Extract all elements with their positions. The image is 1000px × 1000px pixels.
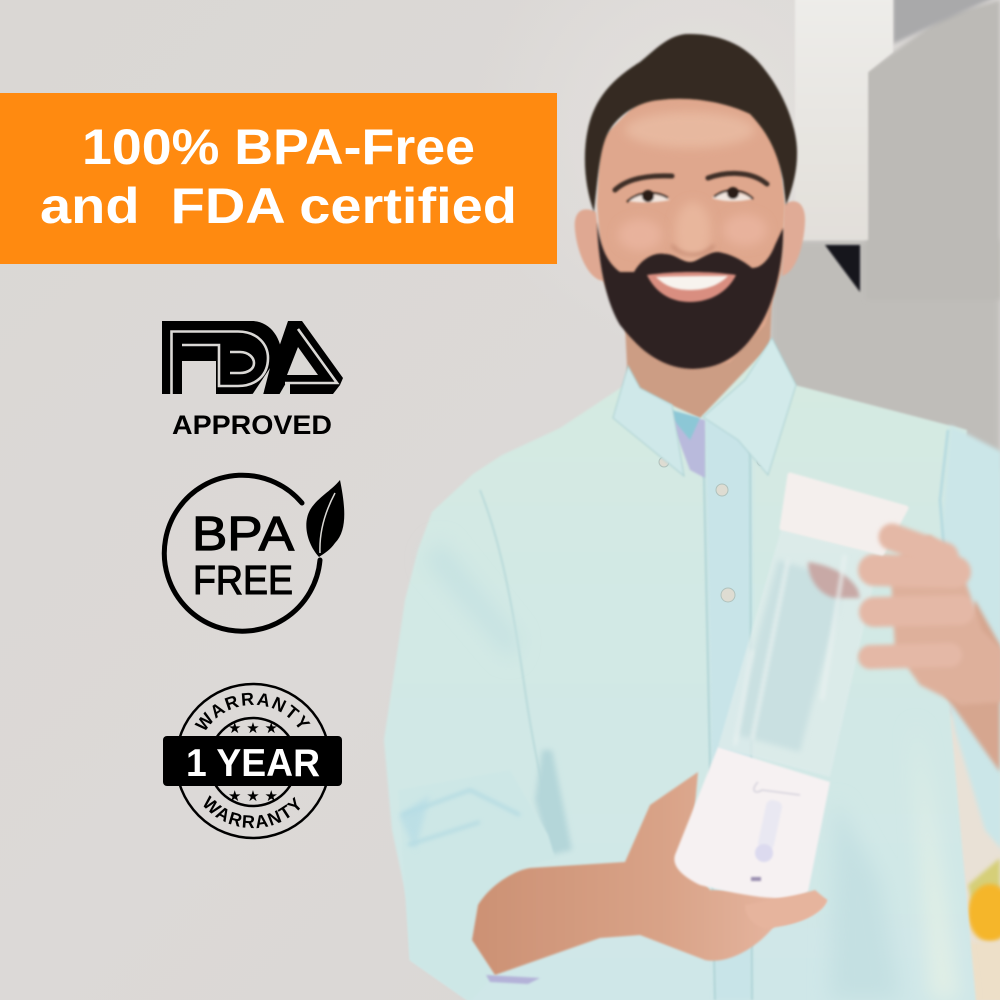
shirt left cuff folds [398,770,555,1000]
under collar stripe [668,412,705,478]
right collar [703,338,796,475]
lower fingers [745,890,827,928]
beard [597,222,783,369]
banner heading: 100% BPA-Free [82,119,475,175]
approved label: APPROVED [172,410,332,440]
right ear [782,201,805,276]
face [597,92,785,370]
FDA cut lines [172,329,337,394]
FDA A counter [287,347,318,375]
year text: 1 YEAR [186,742,320,785]
orange banner [0,93,557,264]
icon: BPA free badge [164,475,344,631]
banner heading: and FDA certified [40,178,517,234]
mouth [647,272,736,302]
nose shadow [672,245,714,255]
palm [890,535,1000,705]
purple cuff lining [486,975,540,984]
right sleeve [940,425,1000,850]
bottle cap [782,475,906,553]
icon: one year warranty stamp [163,682,342,840]
bottle inner tube [738,560,845,752]
BPA text: BPA [192,508,294,561]
neck [625,300,772,418]
fingers [870,570,960,657]
background: kitchen counter with fruit [945,715,1000,1000]
shirt body [384,340,976,1000]
eyebrows [615,173,767,190]
top stars: ★ ★ ★ [228,719,278,737]
year ribbon [163,736,342,786]
bottom warranty text: WARRANTY [204,795,300,828]
shirt buttons [659,456,767,602]
armpit fold [535,750,572,855]
placket [704,418,752,1000]
FDA A letter [263,321,343,394]
teeth [656,276,728,290]
person holding bottle [384,34,1000,1000]
shirt soft folds [425,540,960,1000]
bottle glass [718,530,880,777]
FREE text: FREE [193,557,293,603]
sleeve seam line [480,490,558,850]
left ear [575,209,604,281]
bottom stars: ★ ★ ★ [228,787,278,805]
bottle base [674,747,830,898]
right arm [945,600,1000,772]
stamp rings [176,684,330,838]
upper hand [870,535,1000,705]
finger over cap [892,537,945,556]
top warranty text: WARRANTY [194,692,310,730]
right eye [712,187,753,201]
left eye [627,190,670,202]
leaf [306,480,344,557]
FDA F and D letters [162,321,282,394]
badge ring [164,475,320,631]
bottle base button [751,782,800,881]
left collar [613,366,684,476]
water tint through bottle [808,562,860,598]
icon: FDA approved [162,321,343,440]
lower hand and forearm [472,772,827,975]
hair [585,34,797,212]
banner heading [40,119,517,234]
